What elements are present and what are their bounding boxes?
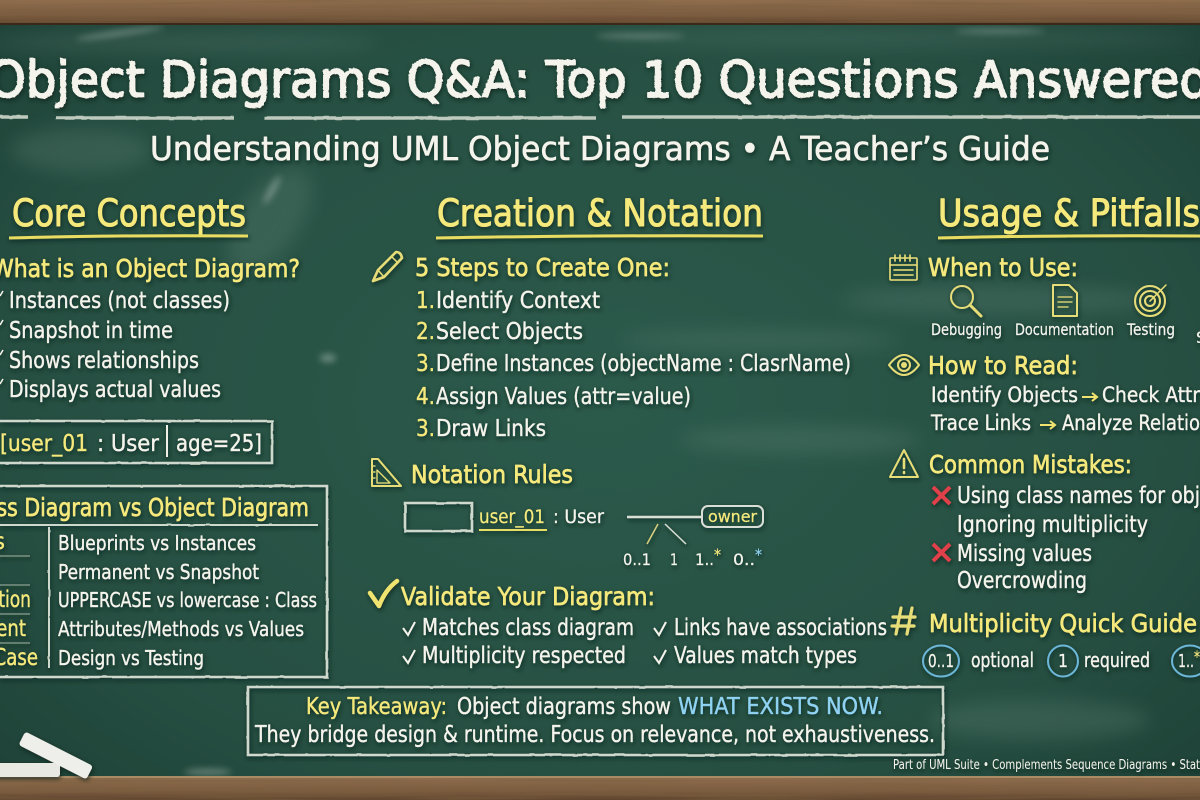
subheading: five steps: 5 Steps to Create One: [415,253,670,282]
flow: how to read: Trace Links [930,411,1031,435]
list: steps: Select Objects [436,319,583,345]
notation example: link with role and multiplicity: 1 [670,550,678,569]
bottom wooden frame [0,776,1200,800]
list: common mistakes: Missing values [957,541,1092,567]
legend: multiplicity: required [1084,648,1150,672]
list: definition points: Snapshot in time [9,318,173,344]
checklist: validation: Links have associations [674,615,887,641]
flow: how to read [930,383,1200,435]
notation example: object box [405,503,604,531]
flow: how to read: Identify Objects [931,383,1078,407]
notation example: link with role and multiplicity [623,506,763,569]
legend: multiplicity: optional [971,648,1034,672]
label: debugging: Debugging [931,320,1002,339]
list: steps: 3. [416,351,435,377]
list: steps: 1. [416,288,435,314]
list: steps: 4. [416,384,435,410]
list: common mistakes [933,483,1200,594]
list: common mistakes: Overcrowding [957,568,1087,594]
subheading: common mistakes: Common Mistakes: [929,450,1132,479]
callout: key takeaway: Object diagrams show [457,694,671,720]
notation example: link with role and multiplicity: * [714,545,721,564]
list: definition points: Shows relationships [9,348,199,374]
example object box: : User [97,431,159,457]
subheading: when to use: When to Use: [928,253,1078,282]
example object box: [user_01 [0,431,88,457]
list: definition points [0,288,230,403]
icon: pencil [373,252,402,281]
subheading: how to read: How to Read: [928,351,1078,380]
list: definition points: Instances (not classes) [9,288,230,314]
title underline [0,117,1200,118]
callout: key takeaway: WHAT EXISTS NOW. [678,694,883,720]
list: steps: 3. [416,416,435,442]
checklist: validation: Values match types [674,643,857,669]
icon: chalk sticks [0,732,93,779]
icon: warning triangle [890,450,918,477]
heading: creation and notation: Creation & Notation [437,192,763,235]
heading: core concepts: Core Concepts [12,192,246,235]
notation example: link with role and multiplicity: * [755,545,762,564]
list: steps: 2. [416,319,435,345]
subheading: validate your diagram: Validate Your Diagram: [401,582,655,611]
top wooden frame [0,0,1200,25]
legend: multiplicity: 0..1 [928,651,954,672]
icon: set square [372,459,401,486]
legend: multiplicity: 1 [1058,651,1068,672]
list: steps: Assign Values (attr=value) [436,384,691,410]
label: testing: Testing [1126,320,1175,339]
example object box: age=25] [176,431,262,457]
icon: calendar [890,255,917,280]
notation example: object box: user_01 [479,506,545,528]
panel: core concepts [0,192,327,677]
icon: hash [892,608,915,634]
checklist: validation: Matches class diagram [422,615,634,641]
list: definition points: Displays actual values [9,377,221,403]
subheading: notation rules: Notation Rules [411,460,573,489]
notation example: link with role and multiplicity: owner [708,507,757,526]
table: class diagram vs object diagram [0,486,327,677]
table: class diagram vs object diagram: Blueprints vs Instances [58,531,256,555]
notation example: link with role and multiplicity: 0..1 [623,550,651,569]
callout: key takeaway: They bridge design & runtime. Focus on relevance, not exhaustiveness. [254,722,935,748]
example object box [0,421,272,463]
legend: multiplicity [923,646,1200,676]
callout: key takeaway [248,687,943,755]
subheading: what is an object diagram: What is an Object Diagram? [0,254,300,283]
list: steps [416,288,851,442]
panel: creation and notation [370,192,887,669]
table: class diagram vs object diagram: Permanent vs Snapshot [58,560,259,584]
icon: target [1135,285,1166,316]
icon: document [1053,285,1077,316]
icon: magnifier [951,286,981,316]
list: steps: Draw Links [436,416,546,442]
notation example: link with role and multiplicity: 1.. [695,550,714,569]
list: common mistakes: Ignoring multiplicity [957,512,1148,538]
list: steps: Identify Context [436,288,600,314]
icon: eye [889,355,919,375]
subtitle: Understanding UML Object Diagrams • A Teacher’s Guide [150,129,1050,168]
panel: usage and pitfalls [889,192,1200,676]
table: class diagram vs object diagram: UPPERCASE vs lowercase : Class [58,588,317,612]
checklist: validation [403,615,887,669]
notation example: object box: : User [553,506,604,528]
table: class diagram vs object diagram: Design vs Testing [58,646,204,670]
notation example: link with role and multiplicity: 0.. [733,550,755,569]
table: class diagram vs object diagram: Attributes/Methods vs Values [58,617,304,641]
list: steps: Define Instances (objectName : ClasrName) [436,351,851,377]
checklist: validation: Multiplicity respected [422,643,626,669]
label: documentation: Documentation [1015,320,1114,339]
callout: key takeaway: Key Takeaway: [306,694,447,720]
icon: large check mark [370,581,397,606]
